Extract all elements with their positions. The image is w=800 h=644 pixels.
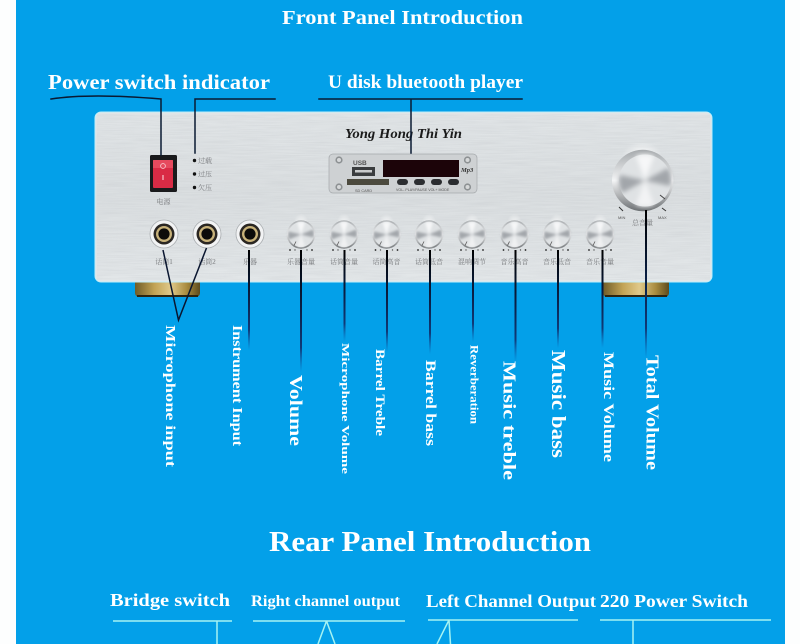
control labels cn: 话筒音量 (330, 257, 358, 266)
icon: power rocker switch (150, 155, 177, 192)
title: front panel: Front Panel Introduction (282, 7, 523, 29)
control labels cn: 乐器音量 (287, 257, 315, 266)
control labels cn: 音乐低音 (543, 257, 571, 266)
mp3 module: VOL- PLAY/PAUSE VOL+ MODE (396, 188, 450, 192)
indicators: 过压 (198, 170, 212, 178)
jack: microphone 1 (150, 220, 178, 248)
callout lines: microphone V (163, 248, 206, 320)
control labels cn: 乐器 (243, 257, 257, 266)
knobs row (287, 214, 614, 251)
heading: U disk bluetooth player: U disk bluetooth player (328, 72, 524, 93)
heading: left channel output: Left Channel Output (426, 591, 596, 611)
knob: total volume (612, 142, 673, 220)
title: rear panel: Rear Panel Introduction (269, 526, 591, 558)
panel body (95, 112, 712, 282)
indicators: 过载 (198, 156, 212, 165)
callout lines: controls (248, 210, 647, 372)
control labels cn: 话筒高音 (372, 257, 400, 266)
knob: total volume: MIN (618, 215, 625, 220)
label: barrel bass: Barrel bass (422, 360, 438, 446)
LED display (383, 160, 459, 177)
mp3 module: Mp3 (460, 167, 474, 174)
mp3 module: SD CARD (355, 189, 372, 193)
callout lines: rear (113, 620, 771, 644)
heading: power switch indicator: Power switch indicator (48, 70, 270, 94)
label: microphone volume: Microphone Volume (339, 343, 351, 474)
jack: instrument (236, 220, 264, 248)
mp3 module: USB (353, 160, 367, 167)
heading: 220 power switch: 220 Power Switch (600, 591, 748, 611)
control labels cn (155, 257, 614, 266)
foot: left (135, 278, 200, 297)
knob: total volume: MAX (658, 215, 667, 220)
jack: microphone 2 (193, 220, 221, 248)
label: instrument input: Instrument Input (229, 325, 244, 446)
label: music bass: Music bass (547, 350, 569, 458)
label: microphone input: Microphone input (162, 325, 177, 467)
label: music treble: Music treble (500, 361, 520, 480)
indicators (193, 156, 212, 192)
control labels cn: 话筒低音 (415, 257, 443, 266)
label: barrel treble: Barrel Treble (373, 349, 388, 436)
label: power: 电源 (156, 197, 171, 206)
label: volume: Volume (286, 375, 306, 446)
mp3 module (329, 154, 477, 193)
heading: bridge switch: Bridge switch (110, 590, 230, 610)
control labels cn: 音乐音量 (586, 257, 614, 266)
label: reverberation: Reverberation (468, 345, 482, 424)
label: total volume cn: 总音量 (632, 218, 653, 227)
control labels cn: 话筒2 (198, 257, 216, 266)
label: total volume: Total Volume (642, 355, 662, 470)
label: music volume: Music Volume (600, 352, 616, 462)
logo text: Yong Hong Thi Yin (345, 127, 462, 142)
control labels cn: 话筒1 (155, 257, 173, 266)
control labels cn: 混响调节 (458, 257, 486, 266)
control labels cn: 音乐高音 (500, 257, 528, 266)
heading: right channel output: Right channel output (251, 593, 401, 610)
foot: right (603, 278, 669, 297)
amplifier front panel (95, 112, 712, 282)
indicators: 欠压 (198, 183, 212, 192)
callout lines: top (51, 96, 522, 155)
